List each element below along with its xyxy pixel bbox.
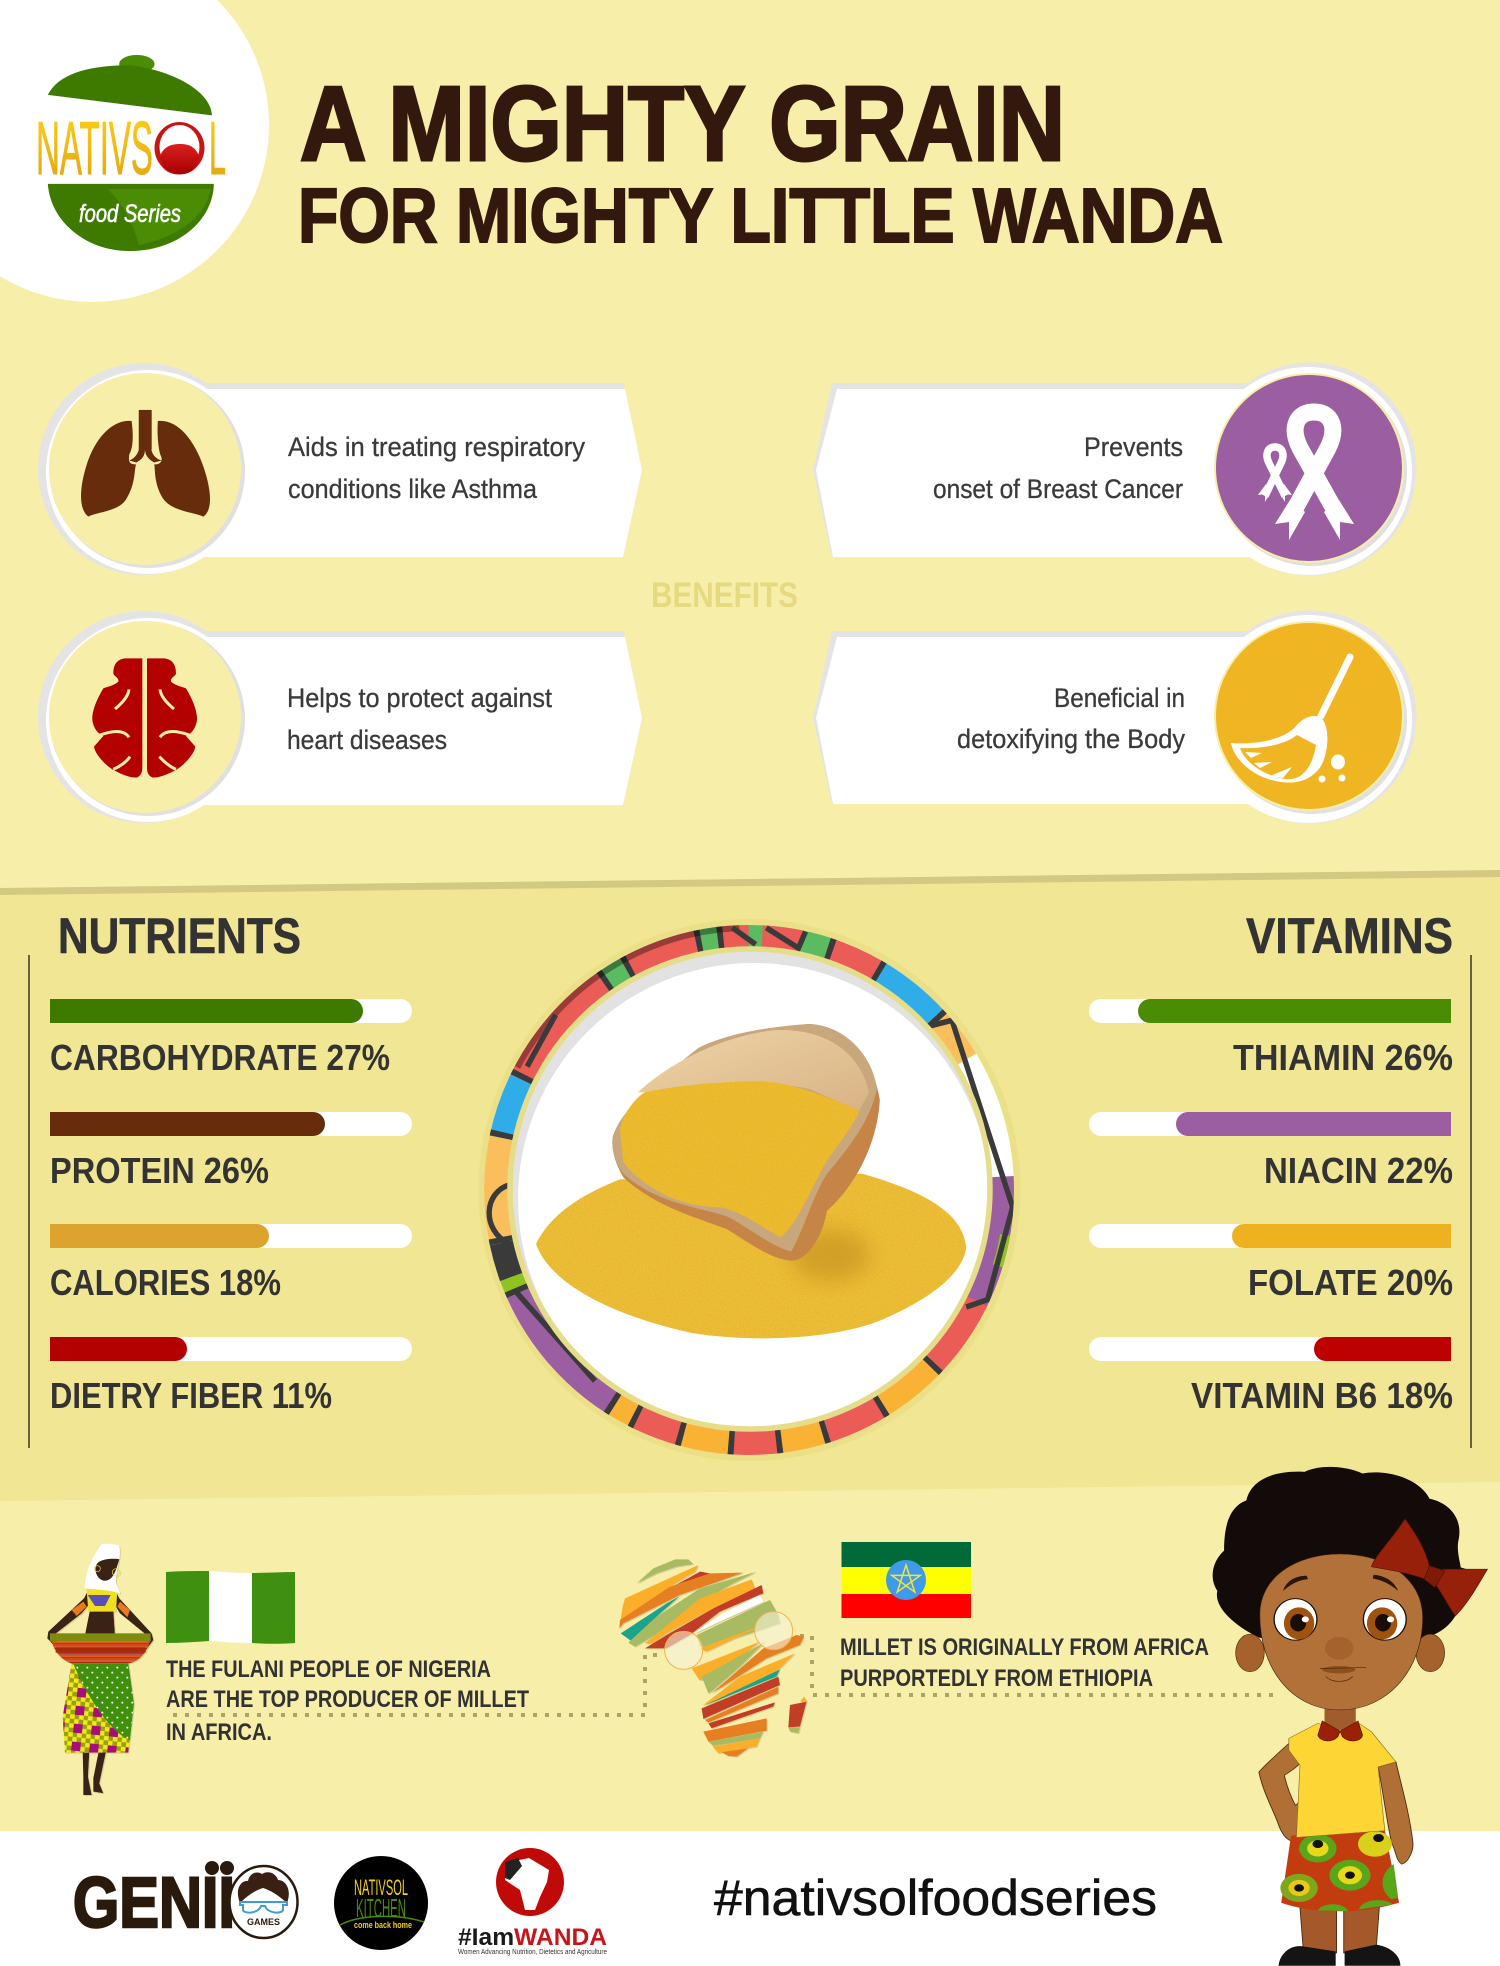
text: Fulani people: IN AFRICA. bbox=[166, 1719, 272, 1746]
icon: glasses lenses bbox=[665, 1612, 793, 1669]
panel: nutrients bbox=[50, 908, 412, 1416]
heading: nutrients: NUTRIENTS bbox=[58, 908, 301, 964]
torso bbox=[85, 1610, 115, 1635]
logo wordmark: O bbox=[154, 110, 205, 190]
title bbox=[298, 65, 1223, 259]
mouth bbox=[1322, 1666, 1355, 1673]
footer logo: Nativsol Kitchen bbox=[334, 1856, 428, 1950]
footer logo: I am Wanda: #IamWANDA bbox=[458, 1924, 607, 1951]
skirt bbox=[63, 1663, 133, 1753]
bar: vitamin b6: VITAMIN B6 18% bbox=[1191, 1375, 1453, 1416]
text: Fulani people: ARE THE TOP PRODUCER OF MILLET bbox=[166, 1686, 529, 1713]
legs bbox=[83, 1752, 106, 1795]
title line 1: A MIGHTY GRAIN bbox=[300, 65, 1065, 183]
bar: folate bbox=[1089, 1224, 1453, 1303]
left arm bbox=[1259, 1743, 1307, 1841]
bar: thiamin: THIAMIN 26% bbox=[1233, 1037, 1453, 1078]
hair bbox=[1213, 1467, 1483, 1638]
footer logo: I am Wanda: Women Advancing Nutrition, Dietetics and Agriculture bbox=[458, 1949, 607, 1956]
panel: benefit heart bbox=[38, 611, 642, 823]
face bbox=[95, 1559, 119, 1581]
benefit text: heart diseases bbox=[287, 725, 447, 755]
bar: protein: PROTEIN 26% bbox=[50, 1150, 269, 1191]
bar: vitamin b6 bbox=[1089, 1337, 1453, 1416]
bar: carbohydrate: CARBOHYDRATE 27% bbox=[50, 1037, 390, 1078]
basket bbox=[52, 1642, 150, 1664]
bar: dietry fiber bbox=[50, 1337, 412, 1416]
illustration: Africa map with glasses bbox=[619, 1559, 807, 1757]
ears bbox=[1236, 1634, 1264, 1672]
text: millet origin: MILLET IS ORIGINALLY FROM AFRICA bbox=[840, 1634, 1209, 1661]
dotted connector: Africa to Wanda bbox=[800, 1636, 1275, 1695]
footer logo: Nativsol Kitchen: come back home bbox=[354, 1920, 412, 1930]
text: Fulani people bbox=[166, 1656, 529, 1746]
bar: niacin bbox=[1089, 1112, 1453, 1191]
central patterned ring with millet bbox=[478, 919, 1020, 1461]
dotted connector: Fulani to Africa bbox=[173, 1655, 660, 1715]
icon: awareness ribbons bbox=[1258, 412, 1354, 540]
text: Fulani people: THE FULANI PEOPLE OF NIGERIA bbox=[166, 1656, 491, 1683]
benefit text: detoxifying the Body bbox=[957, 724, 1185, 754]
icon: broom bbox=[1231, 657, 1350, 783]
icon: lungs bbox=[81, 410, 210, 517]
collar bbox=[1318, 1721, 1362, 1741]
brows bbox=[1283, 1575, 1398, 1591]
neck bbox=[1325, 1707, 1356, 1730]
bar: niacin: NIACIN 22% bbox=[1264, 1150, 1453, 1191]
benefit text: Helps to protect against bbox=[287, 683, 552, 713]
heading: benefits: BENEFITS bbox=[651, 576, 798, 615]
eyes bbox=[1274, 1599, 1406, 1640]
benefit text bbox=[287, 683, 552, 755]
text: millet origin bbox=[840, 1634, 1209, 1692]
text: millet origin: PURPORTEDLY FROM ETHIOPIA bbox=[840, 1665, 1153, 1692]
benefit text: Prevents bbox=[1084, 432, 1183, 462]
benefit text: Beneficial in bbox=[1054, 683, 1185, 713]
footer logo: Genii Games: GENII bbox=[73, 1864, 235, 1943]
bar: calories bbox=[50, 1224, 412, 1303]
bar: calories: CALORIES 18% bbox=[50, 1262, 281, 1303]
millet pile and gourd bowl bbox=[536, 1024, 966, 1338]
white logo circle bbox=[0, 0, 269, 302]
title line 2: FOR MIGHTY LITTLE WANDA bbox=[298, 173, 1223, 259]
bow bbox=[1371, 1519, 1487, 1616]
flag: Ethiopia bbox=[842, 1542, 971, 1618]
ring black lines bbox=[489, 928, 1013, 1381]
benefit text bbox=[288, 432, 585, 504]
skirt bbox=[1281, 1830, 1399, 1911]
shoes bbox=[1279, 1945, 1400, 1966]
bar: carbohydrate bbox=[50, 999, 412, 1078]
benefit text: Aids in treating respiratory bbox=[288, 432, 585, 462]
panel: nutrients and vitamins band bbox=[0, 870, 1500, 1501]
bar: dietry fiber: DIETRY FIBER 11% bbox=[50, 1375, 332, 1416]
nose bbox=[1325, 1637, 1354, 1660]
ring segments bbox=[487, 928, 1011, 1452]
icon: pot lid bbox=[48, 55, 214, 251]
logo subtitle: food Series bbox=[79, 200, 181, 228]
bar: protein bbox=[50, 1112, 412, 1191]
panel: benefit respiratory bbox=[38, 363, 642, 575]
benefit text bbox=[957, 683, 1185, 754]
bar: folate: FOLATE 20% bbox=[1248, 1262, 1453, 1303]
illustration: Fulani woman bbox=[47, 1544, 153, 1795]
right arm bbox=[1378, 1762, 1413, 1864]
face bbox=[1260, 1554, 1423, 1710]
arms bbox=[47, 1590, 153, 1650]
footer logo: I am Wanda bbox=[458, 1848, 607, 1956]
logo wordmark: NATIVS bbox=[36, 106, 153, 190]
legs bbox=[1300, 1906, 1379, 1953]
footer panel bbox=[0, 1831, 1500, 1966]
benefit text bbox=[933, 432, 1183, 504]
header logo: Nativsol food series bbox=[0, 0, 269, 302]
icon: brain bbox=[92, 658, 197, 777]
bar: thiamin bbox=[1089, 999, 1453, 1078]
benefit text: onset of Breast Cancer bbox=[933, 474, 1183, 504]
panel: benefit breast cancer bbox=[813, 362, 1416, 576]
footer logo: Nativsol Kitchen: NATIVSOL bbox=[354, 1875, 408, 1900]
shirt bbox=[1289, 1723, 1396, 1837]
panel: vitamins bbox=[1089, 908, 1453, 1416]
panel: benefit detox bbox=[813, 610, 1416, 824]
blouse bbox=[87, 1590, 117, 1612]
footer logo: Nativsol Kitchen: KITCHEN bbox=[356, 1893, 406, 1923]
header logo: Nativsol food series: L bbox=[209, 106, 226, 190]
benefit text: conditions like Asthma bbox=[288, 474, 538, 504]
footer logo: Genii Games: GAMES bbox=[247, 1917, 280, 1927]
heading: vitamins: VITAMINS bbox=[1246, 908, 1453, 964]
hashtag: #nativsolfoodseries bbox=[714, 1870, 1157, 1926]
flag: Nigeria bbox=[166, 1571, 295, 1644]
illustration: Wanda character bbox=[1213, 1467, 1487, 1966]
inner white plate bbox=[512, 952, 980, 1306]
scarf bbox=[85, 1544, 120, 1594]
